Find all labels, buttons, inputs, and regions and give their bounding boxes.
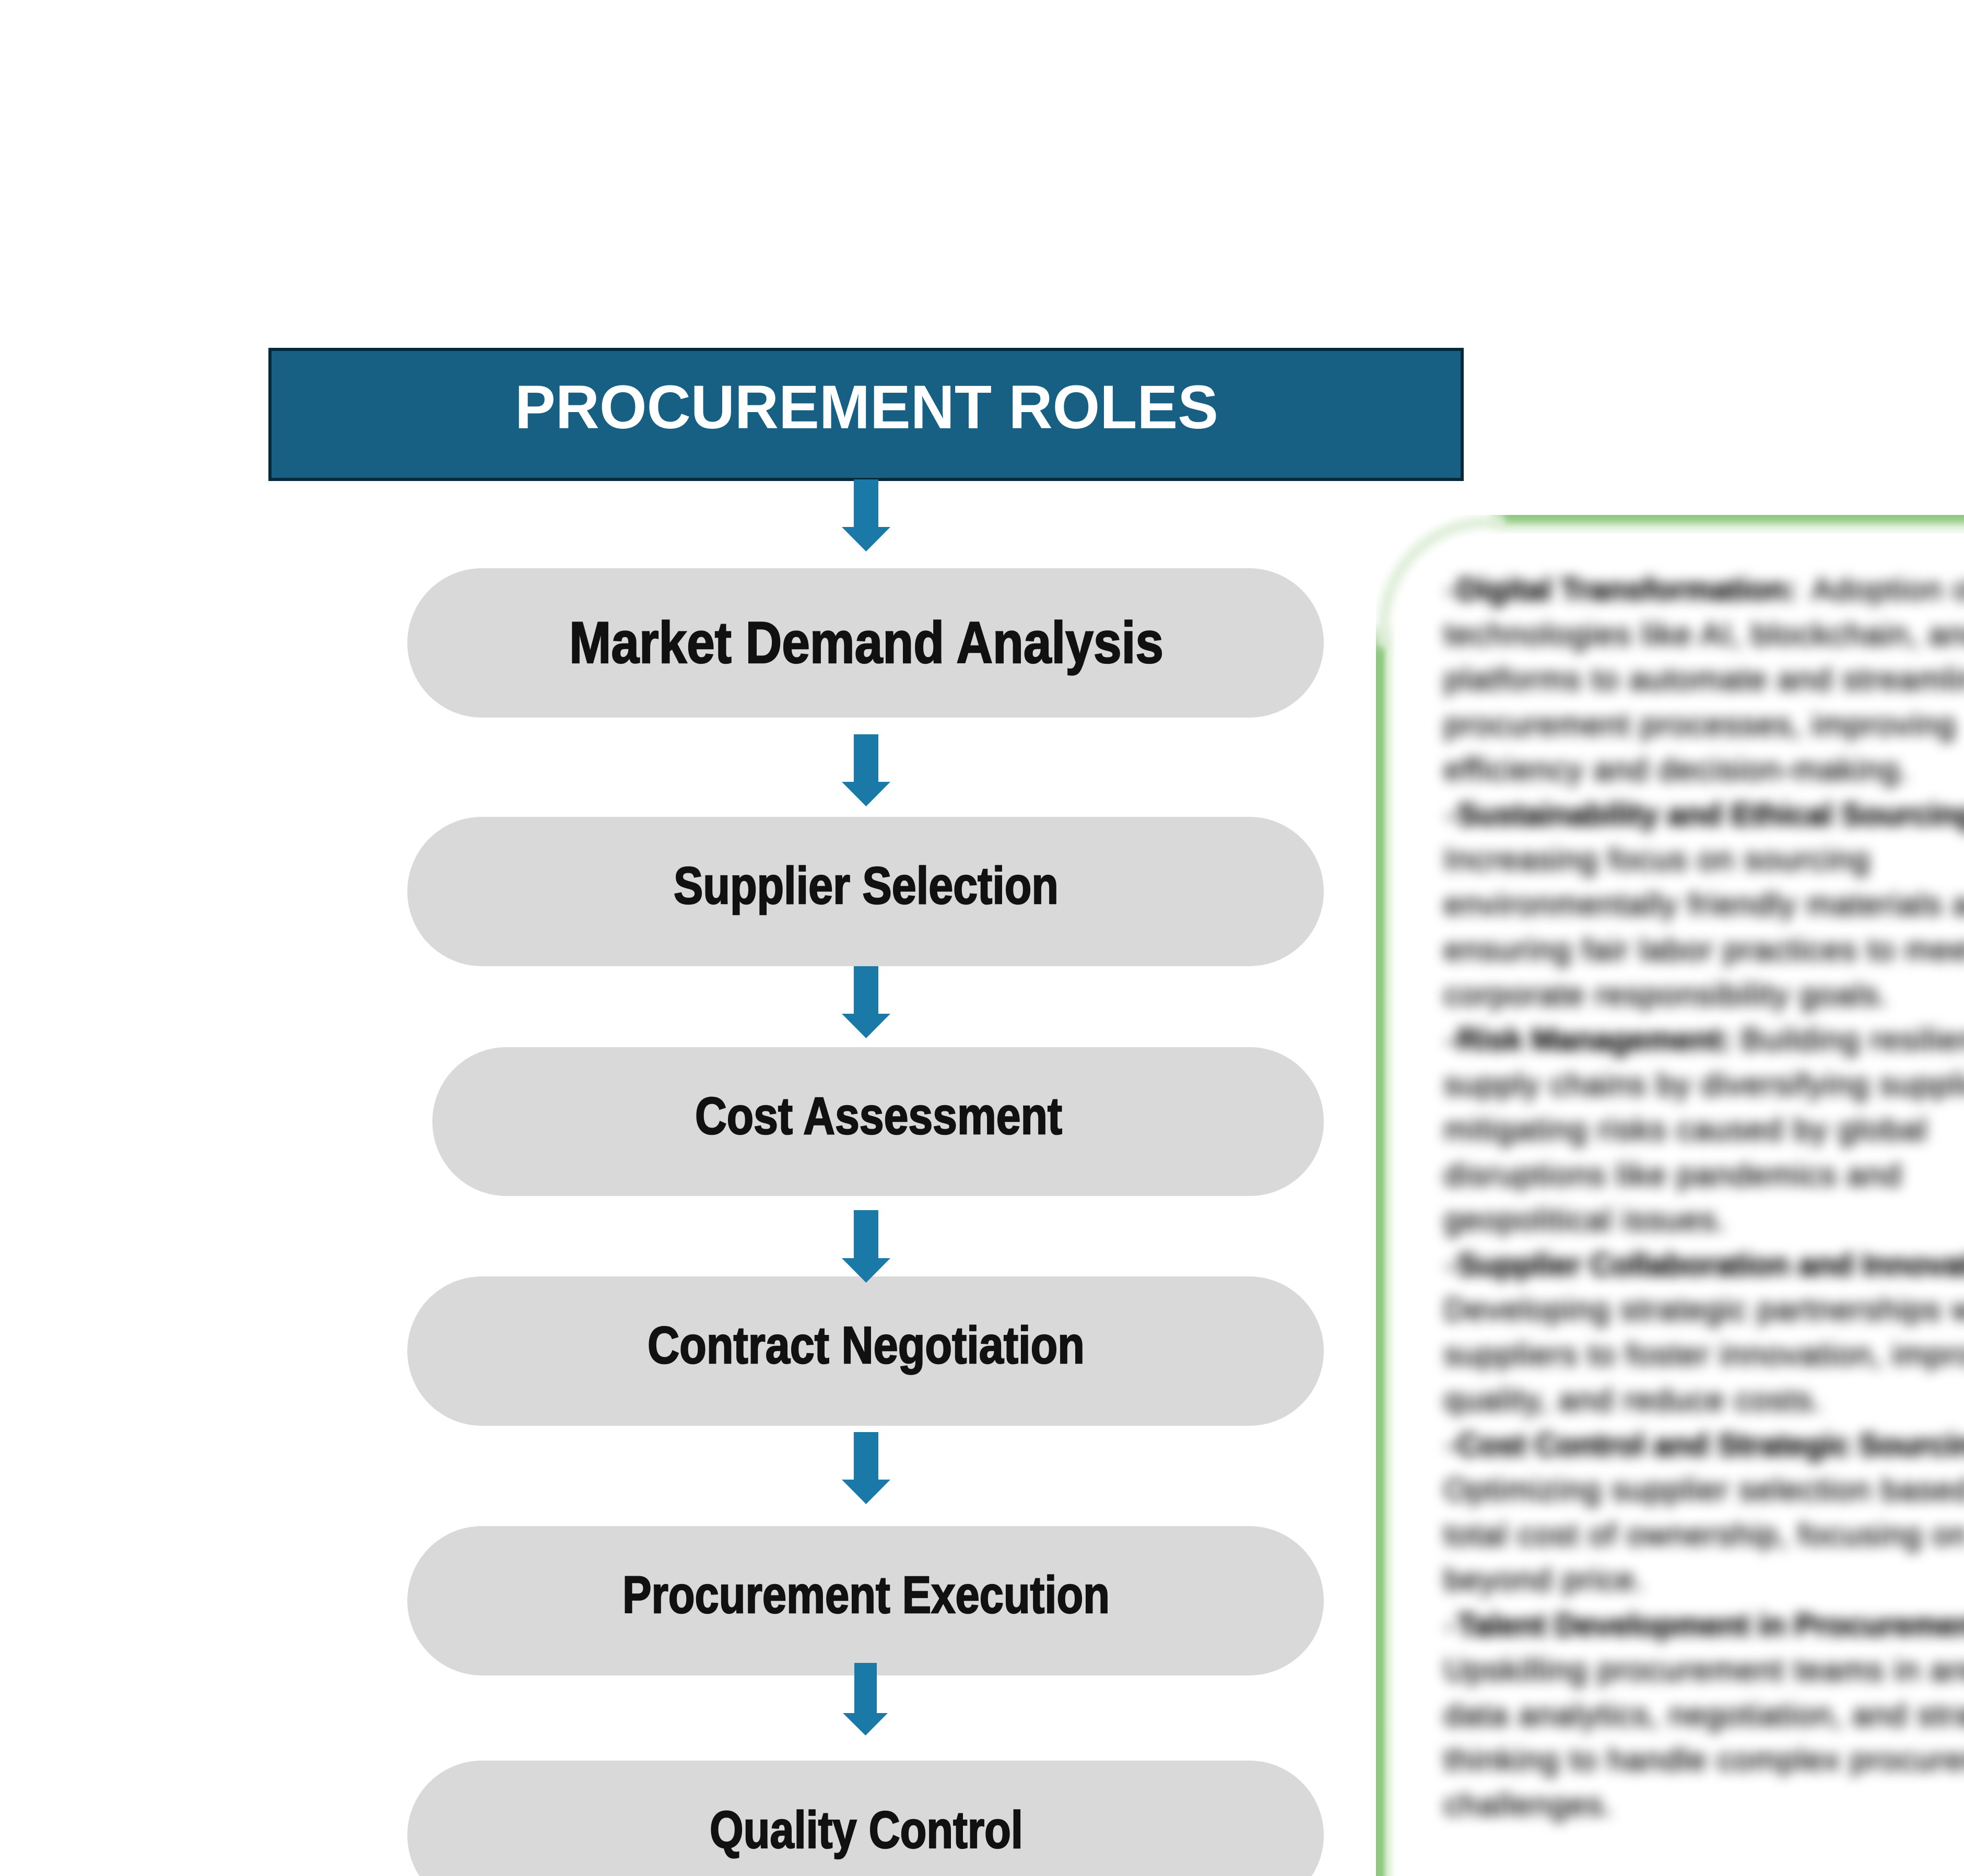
panel body text (blurred): efficiency and decision-making. (1444, 752, 1910, 787)
panel: blurred trends text panel (1376, 515, 1964, 1876)
step: Quality Control (407, 1761, 1324, 1876)
panel body text (blurred): quality, and reduce costs. (1444, 1382, 1822, 1417)
panel border: green rounded frame (1376, 515, 1964, 1876)
arrow: header to market demand analysis (842, 479, 890, 552)
panel body text (blurred): ensuring fair labor practices to meet (1444, 932, 1964, 967)
step: Supplier Selection (407, 817, 1324, 966)
panel body text (blurred): - (1445, 1608, 1456, 1643)
step: Cost Assessment: Cost Assessment (695, 1087, 1062, 1145)
arrow: procurement execution to quality control (843, 1663, 888, 1736)
step: Procurement Execution (407, 1526, 1324, 1675)
step: Quality Control: Quality Control (710, 1801, 1023, 1859)
panel body text (blurred): disruptions like pandemics and (1444, 1157, 1902, 1192)
panel body text (blurred): Digital Transformation: (1457, 572, 1796, 607)
step: Procurement Execution: Procurement Execution (622, 1566, 1110, 1624)
panel body text (blurred): mitigating risks caused by global (1444, 1112, 1927, 1147)
step: Supplier Selection: Supplier Selection (674, 857, 1059, 915)
panel body text (blurred): - (1445, 1022, 1456, 1057)
panel body text (blurred): geopolitical issues. (1444, 1202, 1727, 1237)
panel body text (blurred): challenges. (1444, 1787, 1613, 1822)
panel body text (blurred): Risk Management: (1457, 1022, 1731, 1057)
arrow: supplier selection to cost assessment (842, 966, 890, 1038)
panel body text (blurred): - (1445, 572, 1456, 607)
arrow: contract negotiation to procurement execution (842, 1432, 890, 1504)
step: Cost Assessment (432, 1047, 1324, 1196)
step: Market Demand Analysis: Market Demand Analysis (569, 610, 1163, 675)
step: Contract Negotiation: Contract Negotiation (648, 1316, 1085, 1375)
panel body text (blurred): beyond price. (1444, 1562, 1645, 1597)
header: PROCUREMENT ROLES (270, 349, 1462, 479)
panel body text (blurred): procurement processes, improving (1444, 707, 1956, 742)
arrow: market demand to supplier selection (842, 734, 890, 806)
arrow: cost assessment to contract negotiation (842, 1210, 890, 1283)
step: Contract Negotiation (407, 1276, 1324, 1426)
panel body text (blurred): - (1445, 1247, 1456, 1282)
panel body text (blurred) (1444, 572, 1964, 1822)
panel body text (blurred): Increasing focus on sourcing (1444, 842, 1871, 877)
panel body text (blurred): corporate responsibility goals. (1444, 977, 1889, 1012)
panel body text (blurred): - (1445, 1427, 1456, 1462)
panel body text (blurred): - (1445, 797, 1456, 832)
infographic canvas (268, 348, 1964, 1876)
header: PROCUREMENT ROLES: PROCUREMENT ROLES (515, 373, 1218, 442)
step: Market Demand Analysis (407, 568, 1324, 718)
